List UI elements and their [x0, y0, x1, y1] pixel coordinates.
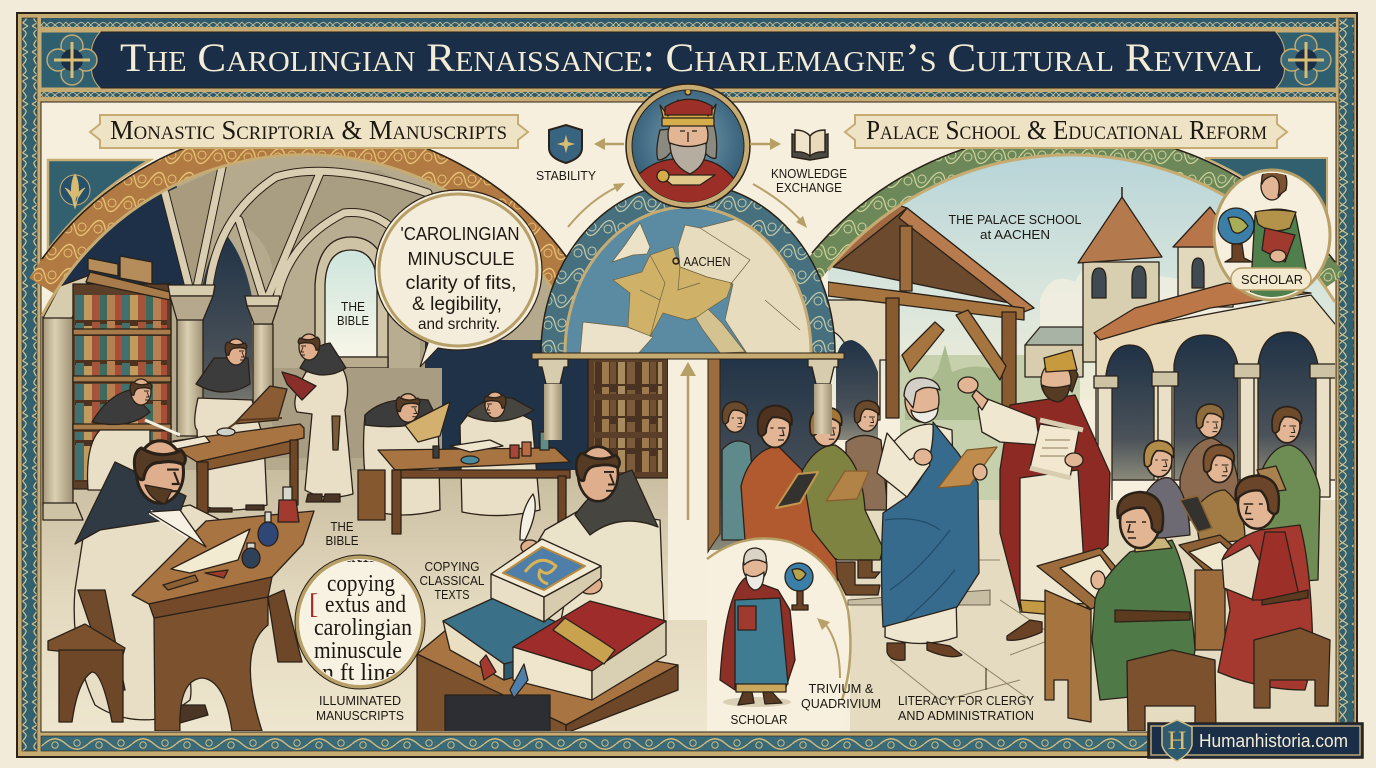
curved arrow — [817, 618, 840, 678]
label: the bible upper: BIBLE — [337, 313, 369, 328]
back writing desk — [162, 386, 304, 517]
speech bubble: Carolingian minuscule: & legibility, — [412, 294, 502, 315]
label: illuminated manuscripts: MANUSCRIPTS — [316, 708, 404, 723]
tan student — [1180, 445, 1245, 545]
title text: The Carolingian Renaissance: Charlemagne’s Cultural Revival — [120, 35, 1262, 80]
magnifying lens with script sample: atin — [345, 542, 381, 568]
speech bubble: Carolingian minuscule — [375, 190, 542, 367]
desks and front writers — [1037, 476, 1330, 731]
watermark badge — [1148, 720, 1363, 761]
student in green — [1257, 406, 1320, 582]
central gap strip with upward arrow — [668, 358, 708, 620]
magnifying lens with script sample: n ft line — [322, 660, 396, 686]
arch band — [553, 195, 823, 353]
label: the bible lower: BIBLE — [326, 533, 359, 548]
panel: monastic scriptorium scene — [42, 140, 712, 735]
magnifying lens with script sample: [ — [309, 589, 318, 620]
label: literacy: AND ADMINISTRATION — [898, 708, 1034, 723]
monk pair at right desk — [364, 392, 540, 516]
slate tablet — [776, 472, 818, 508]
left column — [43, 275, 90, 520]
label: literacy — [898, 668, 1034, 723]
label: scholar: SCHOLAR — [730, 712, 788, 727]
arch: green ornamental band — [812, 132, 1335, 302]
label: the palace school at aachen: at AACHEN — [980, 227, 1050, 242]
dark arcade behind students — [710, 300, 895, 550]
main cream panel — [41, 102, 1336, 732]
clouds — [1040, 270, 1250, 326]
inset: young scholar with globe — [1214, 166, 1330, 300]
map lands — [580, 218, 815, 355]
panel: lower scholar alcove — [707, 538, 850, 731]
label: the palace school at aachen: THE PALACE SCHOOL — [948, 212, 1082, 227]
speech bubble: Carolingian minuscule: MINUSCULE — [408, 249, 514, 269]
label: literacy: LITERACY FOR CLERGY — [898, 693, 1034, 708]
corner ornament left — [41, 32, 100, 88]
Charlemagne figure — [958, 350, 1110, 640]
speech bubble: Carolingian minuscule: and srchrity. — [418, 316, 500, 333]
front stool — [1127, 650, 1216, 731]
column two — [168, 285, 215, 436]
central bookshelf — [588, 358, 668, 478]
magnifying lens with script sample — [295, 542, 425, 689]
arrow: curved down to palace school — [753, 184, 807, 228]
wooden pavilion — [826, 205, 1034, 442]
label: knowledge exchange: EXCHANGE — [776, 180, 842, 195]
spandrel ornament left — [48, 160, 150, 250]
seated students left — [722, 400, 888, 595]
stone floor — [848, 500, 1335, 731]
wooden tablet — [826, 471, 869, 501]
book table — [417, 625, 678, 733]
icon: open book — [792, 130, 828, 160]
writer in green — [1091, 492, 1195, 700]
teacher figure in blue drape — [877, 378, 997, 660]
heading ribbon: palace school: Palace School & Educational Reform — [866, 115, 1267, 145]
student back left — [721, 400, 752, 541]
label: copying classical texts: COPYING — [424, 559, 480, 574]
monk writing at back — [88, 379, 180, 490]
label: trivium and quadrivium: QUADRIVIUM — [801, 696, 881, 711]
icon: shield — [1162, 720, 1192, 761]
label: knowledge exchange: KNOWLEDGE — [771, 166, 847, 181]
column three — [245, 296, 280, 414]
label: copying classical texts: TEXTS — [434, 587, 470, 602]
shield letter: H — [1168, 726, 1187, 755]
big monk illuminating — [520, 447, 664, 625]
label: trivium and quadrivium: TRIVIUM & — [808, 681, 874, 696]
arcade building — [1094, 283, 1340, 505]
label: stability: STABILITY — [536, 168, 596, 183]
blond student — [1142, 440, 1190, 540]
magnifying lens with script sample: carolingian — [314, 615, 412, 641]
standing students right — [1142, 404, 1320, 582]
arrow: to knowledge — [750, 138, 781, 150]
stool — [48, 624, 125, 722]
icon: robed scholar with globe — [720, 548, 813, 707]
back desk — [1179, 535, 1268, 650]
right capital — [808, 359, 838, 434]
stool right — [1254, 628, 1330, 708]
label: copying classical texts: CLASSICAL — [420, 573, 484, 588]
left capital — [538, 359, 568, 440]
map sea — [565, 207, 811, 353]
central map arch — [532, 183, 844, 440]
floor — [42, 470, 712, 735]
spandrel ornament right — [1205, 158, 1327, 258]
arrow: curved up to medallion — [568, 183, 625, 227]
manuscript books stack — [443, 539, 666, 700]
big writing desk — [132, 487, 314, 731]
distant landscape — [900, 327, 1083, 505]
bookshelf — [73, 256, 171, 489]
arrow: to stability — [594, 138, 624, 150]
big monk writing — [74, 439, 220, 724]
beam — [532, 353, 844, 359]
student in brown — [1180, 404, 1240, 520]
label: the bible upper: THE — [341, 299, 365, 314]
magnifying lens with script sample: extus and — [325, 592, 406, 618]
icon: stability shield — [549, 125, 582, 163]
speech bubble: Carolingian minuscule: clarity of fits, — [406, 273, 516, 294]
student in red — [741, 406, 838, 590]
speech bubble: Carolingian minuscule: 'CAROLINGIAN — [400, 224, 520, 244]
aachen label: AACHEN — [684, 254, 730, 269]
label: scholar pill: SCHOLAR — [1241, 272, 1303, 287]
aachen marker — [673, 258, 679, 264]
label: scholar pill — [1231, 268, 1311, 290]
monk at lectern — [195, 339, 267, 512]
corner ornament right — [1276, 32, 1336, 88]
vaulted stone walls — [42, 156, 588, 470]
bell tower — [1078, 187, 1162, 362]
label: illuminated manuscripts: ILLUMINATED — [319, 693, 401, 708]
panel: palace school scene — [710, 140, 1340, 735]
back tower — [1173, 207, 1240, 307]
magnifying lens with script sample: minuscule — [314, 638, 402, 664]
magnifying lens with script sample: copying — [327, 571, 395, 597]
site name: Humanhistoria.com — [1199, 731, 1348, 751]
right desk with ink bottles — [358, 432, 570, 536]
title banner — [41, 32, 1336, 88]
monk standing with book — [282, 334, 353, 502]
sky — [828, 156, 1335, 390]
writer in red — [1218, 476, 1313, 690]
arch: brown ornamental band — [42, 125, 575, 331]
heading ribbon: monastic scriptoria: Monastic Scriptoria & Manuscripts — [110, 115, 507, 145]
front desk — [1037, 548, 1135, 722]
portrait medallion of Charlemagne — [626, 84, 750, 210]
student back right — [846, 400, 888, 510]
label: the bible lower: THE — [330, 519, 354, 534]
student in olive — [800, 407, 883, 595]
vault ribs — [165, 167, 428, 297]
right scene frame post — [708, 358, 720, 552]
